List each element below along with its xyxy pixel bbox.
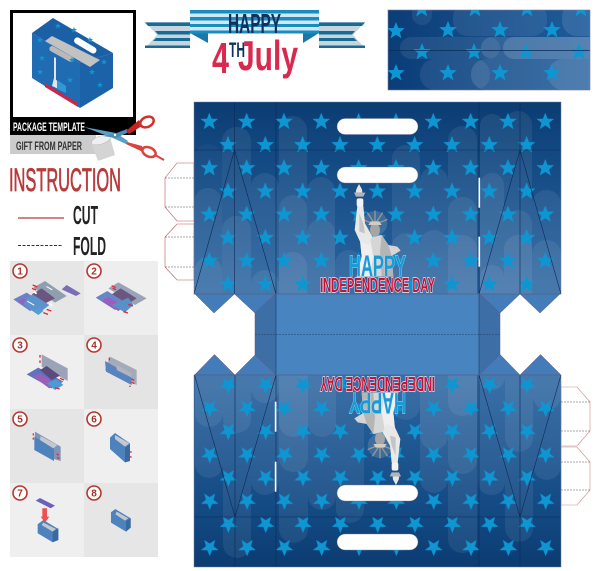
label: gift from paper: GIFT FROM PAPER <box>16 139 82 153</box>
panel: folding steps: 7 <box>17 488 23 500</box>
step 7 <box>36 498 58 542</box>
text: package template: PACKAGE TEMPLATE <box>13 120 85 134</box>
panel: folding steps: 4 <box>91 340 97 352</box>
step 3 <box>27 354 68 390</box>
panel: left glue tabs <box>165 163 194 280</box>
panel: bottom band with flaps <box>194 293 561 375</box>
handle cut-outs <box>337 118 418 550</box>
step numbers <box>13 264 101 500</box>
text: bottom panel happy: HAPPY <box>349 386 406 419</box>
panel: package thumbnail <box>10 10 136 135</box>
heading: instruction: INSTRUCTION <box>9 162 121 198</box>
panel: bottom box face <box>194 374 562 568</box>
panel: folding steps <box>10 261 158 557</box>
text: top panel independence day: INDEPENDENCE DAY <box>320 275 435 297</box>
text: 4: 4 <box>212 34 229 83</box>
step 8 <box>111 509 131 532</box>
icon: scissors <box>84 115 164 160</box>
text: FOLD <box>73 231 106 261</box>
step 2 <box>96 282 147 313</box>
side slits <box>275 178 480 492</box>
panel: right glue tabs <box>561 387 590 505</box>
panel: folding steps: 1 <box>17 266 23 278</box>
illustration: isometric gift bag <box>32 18 113 108</box>
step diagrams <box>13 281 147 542</box>
text: happy: HAPPY <box>228 8 281 39</box>
illustration: statue of liberty top <box>354 184 401 277</box>
text: bottom panel independence day: INDEPENDENCE DAY <box>320 372 435 394</box>
illustration: statue of liberty bottom <box>354 392 401 485</box>
label: gift from paper <box>10 135 96 154</box>
step 4 <box>105 357 137 387</box>
text: top panel happy: HAPPY <box>349 250 406 283</box>
panel: folding steps: 6 <box>91 414 97 426</box>
panel: folding steps: 2 <box>91 266 97 278</box>
text: CUT <box>73 200 98 230</box>
step 5 <box>33 432 61 461</box>
legend: fold <box>18 231 106 261</box>
panel: folding steps: 3 <box>17 340 23 352</box>
step 1 <box>13 281 81 315</box>
icon: tape roll <box>90 133 115 161</box>
panel: folding steps: 5 <box>17 414 23 426</box>
text: july: July <box>238 32 298 79</box>
text: th: TH <box>229 39 245 62</box>
legend: cut <box>18 200 98 230</box>
panel: top-right lid piece <box>388 10 590 90</box>
panel: top box face <box>194 102 562 294</box>
panel: folding steps: 8 <box>91 488 97 500</box>
step 6 <box>110 433 132 462</box>
banner: happy 4th of july <box>145 8 365 83</box>
